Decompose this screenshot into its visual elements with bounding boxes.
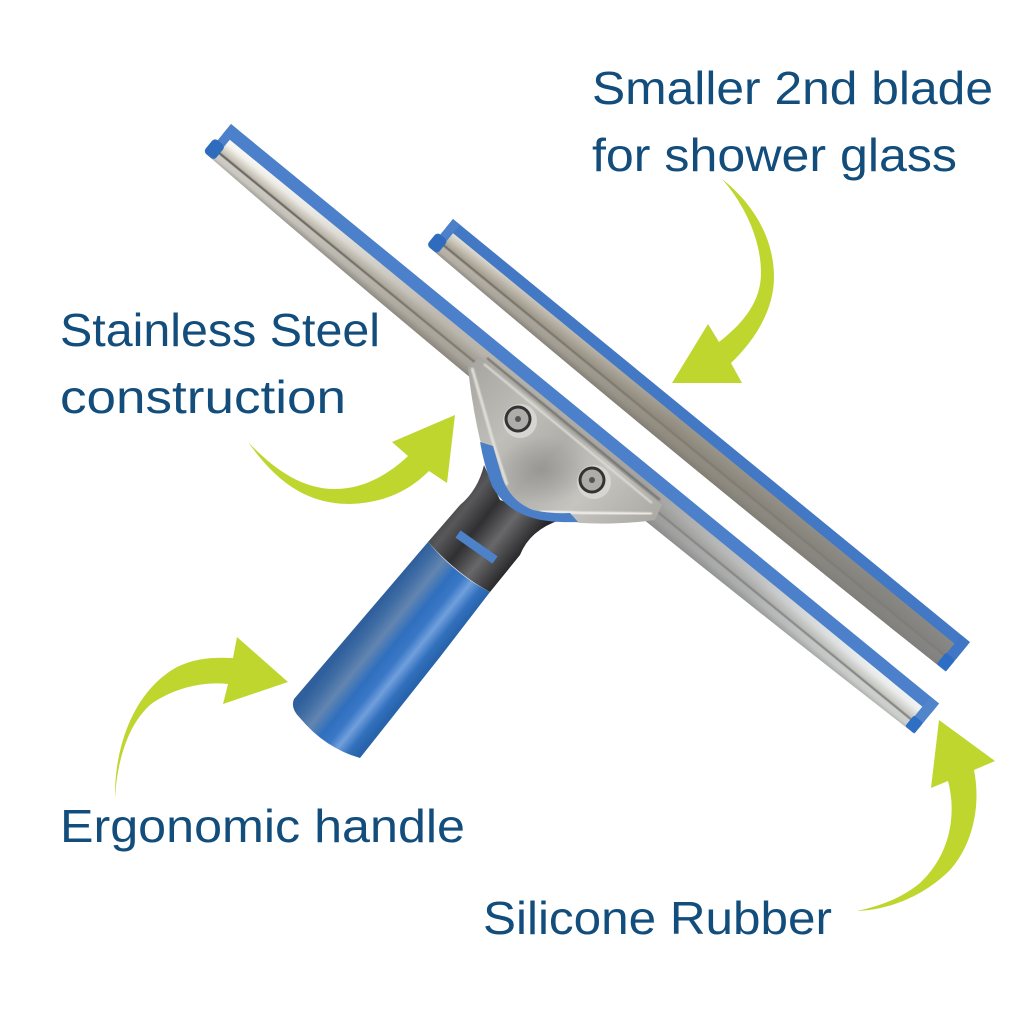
screw lower	[577, 465, 611, 499]
stainless steel bracket	[468, 357, 662, 524]
label: stainless steel	[60, 304, 380, 423]
label: silicone rubber: Silicone Rubber	[483, 892, 832, 944]
arrow: to handle	[115, 637, 288, 799]
label: ergonomic handle: Ergonomic handle	[60, 800, 465, 852]
screw upper	[503, 404, 537, 438]
handle black neck	[428, 465, 560, 592]
label: second blade	[592, 62, 993, 181]
arrow: to second blade	[672, 179, 774, 383]
second smaller blade	[424, 216, 970, 673]
label: stainless steel: Stainless Steel	[60, 304, 380, 356]
ergonomic blue handle	[293, 542, 490, 758]
arrow: to silicone rubber	[857, 720, 995, 911]
main blade	[199, 121, 939, 738]
label: stainless steel: construction	[60, 371, 346, 423]
arrow: to stainless bracket	[248, 415, 455, 504]
label: second blade: for shower glass	[592, 129, 957, 181]
label: second blade: Smaller 2nd blade	[592, 62, 993, 114]
